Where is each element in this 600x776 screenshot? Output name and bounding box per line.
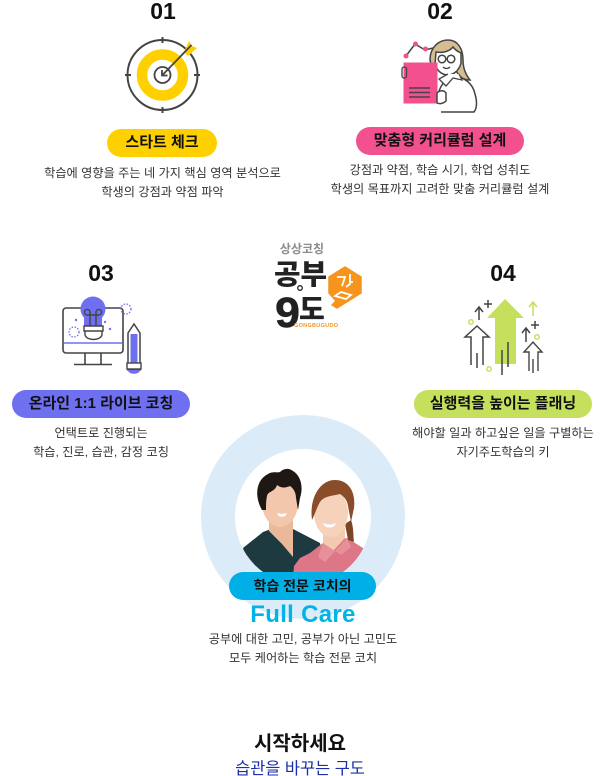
description: coach: 공부에 대한 고민, 공부가 아닌 고민도 <box>209 632 397 646</box>
panel: step 02 <box>331 0 549 196</box>
logo wordmark top: 공부 <box>274 259 327 290</box>
description 02: 학생의 목표까지 고려한 맞춤 커리큘럼 설계 <box>331 182 549 196</box>
description 01: 학습에 영향을 주는 네 가지 핵심 영역 분석으로 <box>44 166 281 180</box>
pill: online live coaching <box>12 390 190 418</box>
description 02 <box>331 163 549 196</box>
logo wordmark bottom <box>275 289 325 337</box>
logo tagline: 상상코칭 <box>280 241 324 256</box>
pill: learning expert coach <box>229 572 376 600</box>
woman <box>294 538 364 572</box>
description 02: 강점과 약점, 학습 시기, 학업 성취도 <box>350 163 530 177</box>
pill: custom curriculum design <box>356 127 524 155</box>
description: coach: 모두 케어하는 학습 전문 코치 <box>229 650 377 664</box>
logo wordmark bottom: 도 <box>299 294 325 325</box>
number 04: 04 <box>490 260 516 286</box>
description 04: 해야할 일과 하고싶은 일을 구별하는 <box>412 426 594 440</box>
panel: step 01 <box>44 0 281 199</box>
closing text <box>235 733 365 776</box>
pill: start check <box>107 129 217 157</box>
heading: Full Care: Full Care <box>250 601 356 628</box>
logo subtitle: GONGBUGUDO <box>294 323 339 329</box>
description 04: 자기주도학습의 키 <box>456 445 550 459</box>
logo orange hexagon <box>329 267 361 308</box>
man <box>243 529 325 573</box>
pill: planning to boost execution <box>414 390 592 418</box>
description 03: 언택트로 진행되는 <box>54 426 148 440</box>
panel: full care coach <box>201 415 405 664</box>
circle with coach photo illustration <box>201 415 405 619</box>
description 03 <box>33 426 169 459</box>
icon: monitor with bulb and pencil <box>62 296 142 374</box>
description 04 <box>412 426 594 459</box>
description 03: 학습, 진로, 습관, 감정 코칭 <box>33 445 169 459</box>
description 01 <box>44 166 281 199</box>
panel: step 03 <box>12 260 190 459</box>
icon: target graphic <box>125 37 200 113</box>
pill: online live coaching: 온라인 1:1 라이브 코칭 <box>29 395 173 412</box>
pill: planning to boost execution: 실행력을 높이는 플래닝 <box>430 395 576 412</box>
panel: logo <box>274 241 362 335</box>
pill: custom curriculum design: 맞춤형 커리큘럼 설계 <box>374 132 506 149</box>
description 01: 학생의 강점과 약점 파악 <box>101 185 224 199</box>
pill: start check: 스타트 체크 <box>125 134 199 151</box>
closing heading: 시작하세요 <box>254 733 346 755</box>
icon: girl holding a pink document <box>401 39 478 113</box>
description: coach <box>209 632 397 664</box>
icon: rising arrows <box>463 299 544 375</box>
pill: learning expert coach: 학습 전문 코치의 <box>254 578 351 594</box>
number 03: 03 <box>88 260 114 286</box>
panel: step 04 <box>412 260 594 459</box>
